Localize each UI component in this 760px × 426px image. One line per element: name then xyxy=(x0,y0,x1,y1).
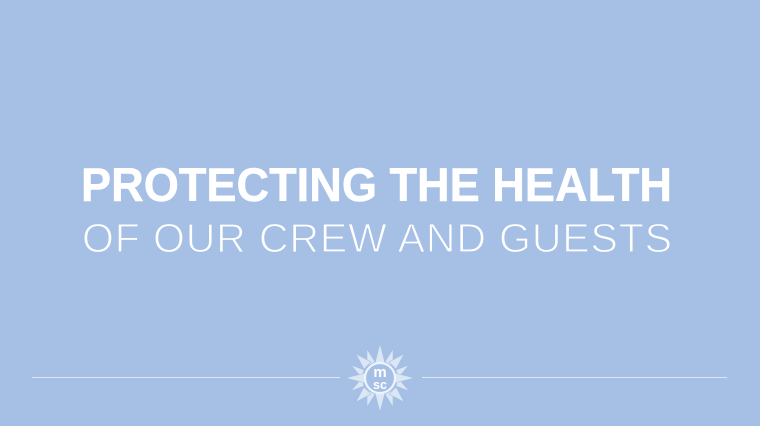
right divider line xyxy=(422,377,727,378)
title: protecting the health: PROTECTING THE HEALTH xyxy=(81,158,672,211)
icon: MSC compass logo: sc xyxy=(373,378,387,392)
icon: MSC compass logo xyxy=(346,344,414,412)
subtitle: of our crew and guests: OF OUR CREW AND GUESTS xyxy=(82,215,672,261)
logo text: msc: m xyxy=(373,364,387,381)
left divider line xyxy=(32,377,340,378)
